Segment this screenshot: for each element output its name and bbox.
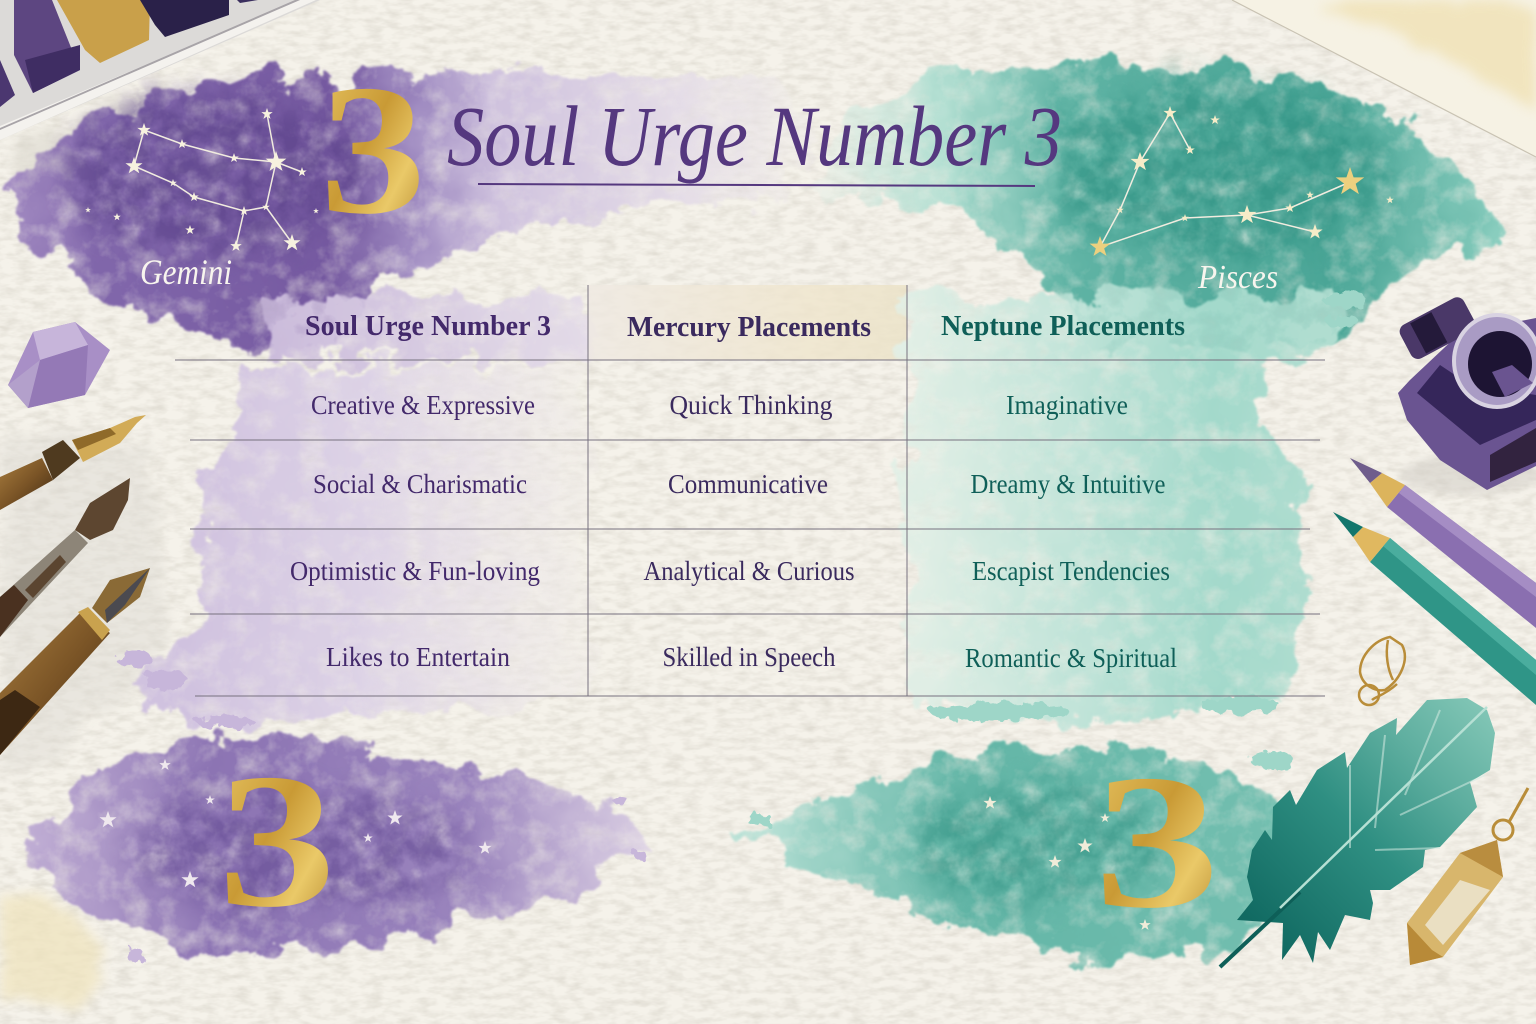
gold numeral: bottom teal: 3 [1094, 735, 1220, 948]
small crystal [8, 322, 110, 408]
column: neptune placements [941, 310, 1185, 673]
fountain pen [0, 568, 150, 755]
gold ring charm [1359, 637, 1405, 705]
column: soul urge number 3: Social & Charismatic [313, 469, 527, 499]
purple pencil [1350, 458, 1536, 628]
column: soul urge number 3: Likes to Entertain [326, 642, 510, 672]
column: mercury placements: Mercury Placements [627, 311, 871, 343]
teal pencil [1333, 512, 1536, 705]
feather [1220, 698, 1495, 967]
table wash: mercury header [588, 285, 907, 360]
column: neptune placements: Romantic & Spiritual [965, 643, 1177, 673]
pisces label: Pisces [1197, 259, 1278, 296]
gold numeral: bottom purple [99, 734, 492, 947]
ink bottle [1397, 294, 1536, 495]
column: mercury placements: Skilled in Speech [662, 642, 836, 672]
title: Soul Urge Number 3 [447, 88, 1062, 184]
gold numeral: bottom teal [983, 735, 1220, 948]
column: mercury placements: Quick Thinking [670, 390, 832, 420]
watercolor wash: top purple [5, 70, 815, 355]
paint splatter [117, 291, 1367, 962]
table wash: purple column [130, 295, 590, 725]
comparison table [175, 285, 1325, 696]
gold ballpoint pen [0, 415, 146, 510]
column: soul urge number 3: Optimistic & Fun-loving [290, 556, 540, 586]
column: soul urge number 3 [290, 310, 551, 672]
column: mercury placements: Analytical & Curious [644, 556, 854, 586]
gemini constellation [85, 108, 319, 251]
column: mercury placements: Communicative [668, 469, 828, 499]
column: soul urge number 3: Soul Urge Number 3 [305, 310, 551, 342]
column: neptune placements: Imaginative [1006, 390, 1128, 420]
watercolor wash: bottom purple [25, 735, 660, 955]
watercolor wash: bottom teal [740, 750, 1290, 960]
table wash: teal column [908, 295, 1340, 725]
gold numeral: top: 3 [320, 47, 426, 253]
column: neptune placements: Escapist Tendencies [972, 556, 1170, 586]
paper corner top right [1232, 0, 1536, 157]
pisces constellation [1090, 106, 1394, 256]
column: mercury placements [627, 311, 871, 672]
gold crystal pendant [1407, 788, 1528, 965]
table rules [175, 285, 1325, 696]
watercolor palette [0, 0, 320, 140]
column: neptune placements: Dreamy & Intuitive [970, 469, 1166, 499]
gold numeral: bottom purple: 3 [218, 734, 336, 947]
watercolor wash: top teal [800, 60, 1510, 350]
column: soul urge number 3: Creative & Expressive [311, 390, 535, 420]
paintbrush [0, 478, 130, 637]
gemini label: Gemini [140, 252, 232, 292]
column: neptune placements: Neptune Placements [941, 310, 1185, 342]
